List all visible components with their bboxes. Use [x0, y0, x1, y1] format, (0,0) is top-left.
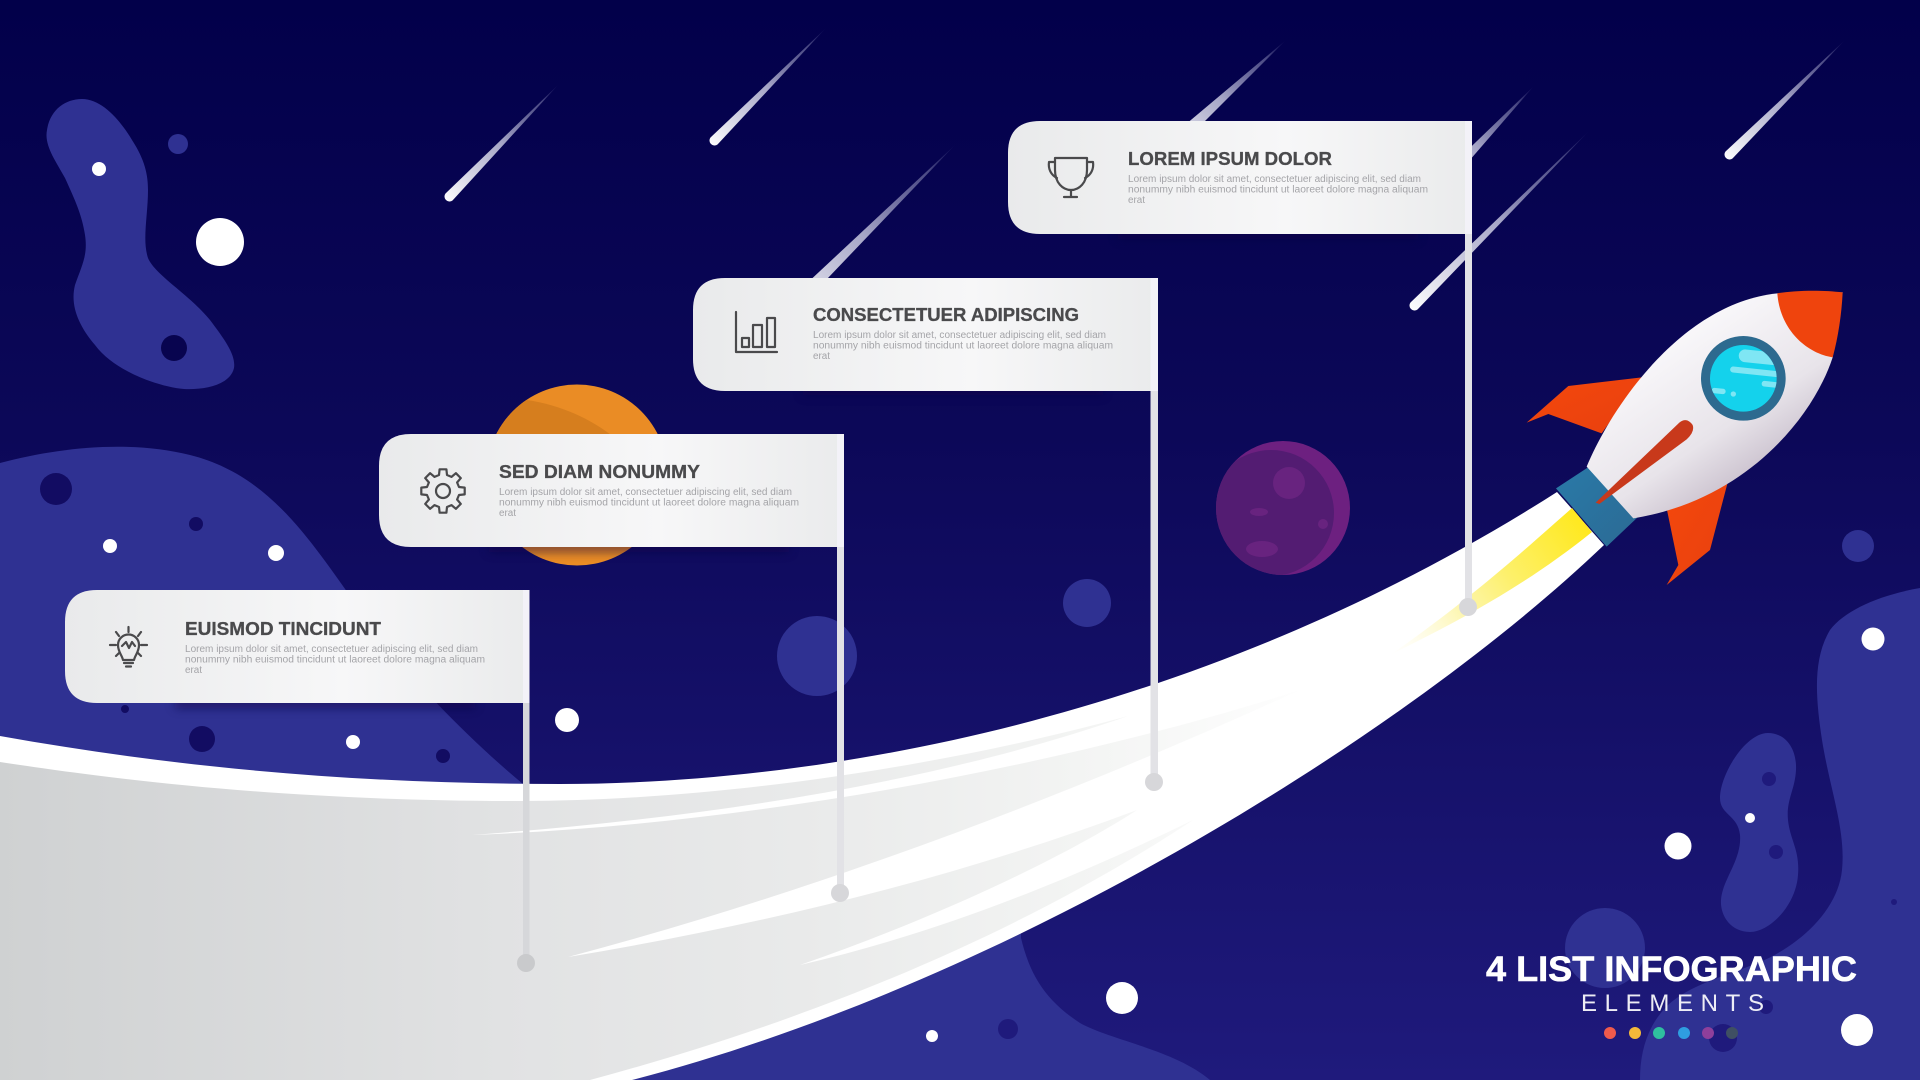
shadow 4 [1118, 229, 1418, 239]
rocket flame [1390, 508, 1592, 655]
icon: trophy [1049, 158, 1093, 197]
heading 4: LOREM IPSUM DOLOR [1128, 148, 1332, 169]
pole 3 [1145, 390, 1163, 791]
body text 1 [185, 644, 485, 676]
rocket nozzle band [1556, 465, 1638, 547]
free circles [168, 134, 1874, 860]
rocket nose [1777, 291, 1843, 357]
body text 3: erat [813, 351, 830, 362]
card 3 [693, 278, 1158, 391]
planet: orange [496, 384, 658, 566]
rocket stripe [1596, 420, 1693, 504]
body text 4: erat [1128, 195, 1145, 206]
shadow 1 [175, 698, 475, 708]
pole cap 1 [523, 590, 530, 703]
flag 3: consectetuer adipiscing [693, 278, 1163, 791]
heading 3: CONSECTETUER ADIPISCING [813, 304, 1079, 325]
body text 1: nonummy nibh euismod tincidunt ut laoreet dolore magna aliquam [185, 654, 485, 666]
icon: bar chart [736, 312, 777, 352]
pole cap 3 [1150, 278, 1158, 391]
body text 3 [813, 330, 1113, 362]
body text 3: Lorem ipsum dolor sit amet, consectetuer adipiscing elit, sed diam [813, 330, 1106, 341]
body text 2: Lorem ipsum dolor sit amet, consectetuer adipiscing elit, sed diam [499, 487, 792, 498]
shadow 3 [803, 385, 1103, 395]
pole 2 [831, 546, 849, 902]
meteors [444, 28, 1845, 326]
planet: purple [1208, 441, 1350, 576]
title [1486, 950, 1857, 1017]
trail grey shading [0, 690, 1300, 1080]
card 4 [1008, 121, 1472, 234]
title main line: 4 LIST INFOGRAPHIC [1486, 950, 1857, 989]
rocket fins [1527, 377, 1728, 585]
heading 1: EUISMOD TINCIDUNT [185, 618, 382, 639]
pole 4 [1459, 233, 1477, 616]
blob: bottom centre [560, 900, 1210, 1080]
white trail swoosh [0, 492, 1604, 1080]
heading 2: SED DIAM NONUMMY [499, 461, 701, 482]
body text 4: nonummy nibh euismod tincidunt ut laoreet dolore magna aliquam [1128, 184, 1428, 196]
rocket [1527, 291, 1843, 585]
pole cap 4 [1465, 121, 1472, 234]
blob: top left [46, 99, 234, 389]
body text 2: nonummy nibh euismod tincidunt ut laoreet dolore magna aliquam [499, 498, 799, 508]
body text 4 [1128, 174, 1428, 206]
body text 2: erat [499, 508, 516, 519]
colour dots [1604, 1027, 1738, 1039]
shadow 2 [489, 542, 789, 552]
flag 1: euismod tincidunt [65, 590, 535, 972]
blob: bottom right [1640, 588, 1920, 1080]
body text 4: Lorem ipsum dolor sit amet, consectetuer adipiscing elit, sed diam [1128, 174, 1421, 185]
card 1 [65, 590, 530, 703]
body text 1: erat [185, 665, 202, 676]
body text 3: nonummy nibh euismod tincidunt ut laoreet dolore magna aliquam [813, 340, 1113, 352]
flag 4: lorem ipsum dolor [1008, 121, 1477, 616]
card 2 [379, 434, 844, 547]
pole 1 [517, 703, 535, 972]
body text 2 [499, 487, 799, 519]
pole cap 2 [837, 434, 844, 547]
rocket porthole [1701, 336, 1786, 421]
rocket body [1587, 292, 1843, 518]
icon: light bulb [110, 627, 147, 666]
blob: lower left [0, 447, 523, 830]
circle: decoration near bottom right [1565, 908, 1645, 988]
blob: small right [1720, 733, 1798, 932]
title sub line: ELEMENTS [1581, 990, 1764, 1017]
body text 1: Lorem ipsum dolor sit amet, consectetuer adipiscing elit, sed diam [185, 644, 478, 655]
flag 2: sed diam nonummy [379, 434, 849, 902]
icon: gear [421, 469, 465, 513]
